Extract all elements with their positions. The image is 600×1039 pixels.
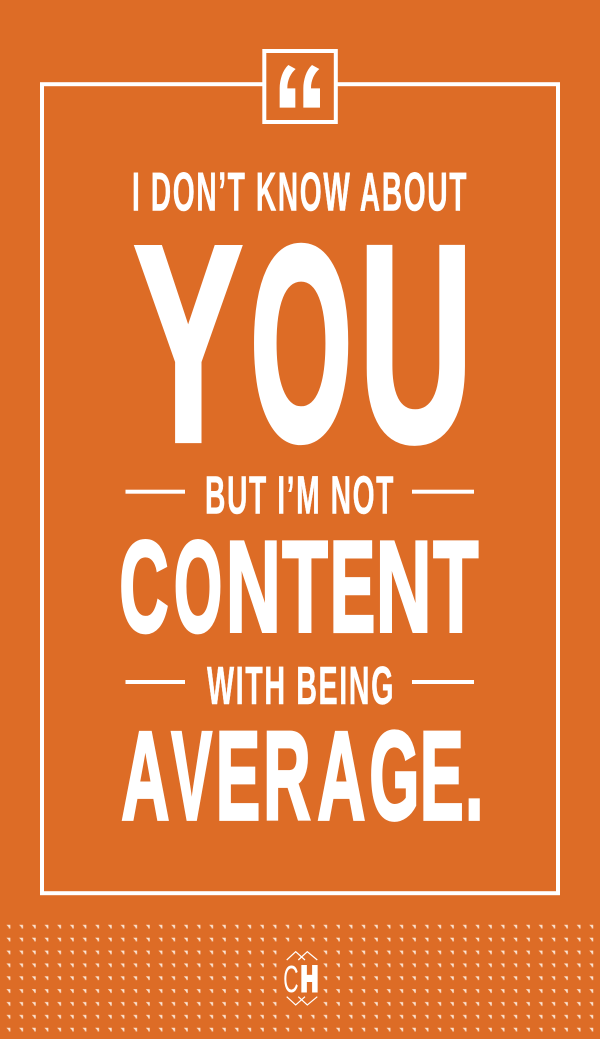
heading: YOU: U xyxy=(359,187,473,501)
heading: YOU: O xyxy=(250,189,352,497)
heading: AVERAGE.: R xyxy=(263,708,311,847)
divider row: with being: WITH BEING xyxy=(207,656,395,716)
heading: CONTENT: N xyxy=(226,515,281,659)
logo: CH: H xyxy=(301,959,318,999)
heading: AVERAGE.: E xyxy=(420,708,464,847)
logo: CH: C xyxy=(283,957,299,1000)
heading: AVERAGE.: V xyxy=(172,706,212,846)
heading: YOU xyxy=(134,187,473,501)
divider row: but I'm not: BUT I’M NOT xyxy=(205,465,395,525)
heading: AVERAGE.: . xyxy=(465,707,483,847)
frame xyxy=(42,84,558,893)
divider row: with being xyxy=(126,656,474,716)
divider row: but I'm not xyxy=(126,465,474,525)
heading: AVERAGE.: A xyxy=(122,707,169,847)
heading: CONTENT: E xyxy=(330,514,375,659)
heading: AVERAGE.: G xyxy=(370,707,419,847)
heading: CONTENT xyxy=(119,513,478,659)
heading: AVERAGE.: E xyxy=(216,707,260,847)
heading: CONTENT: N xyxy=(376,515,432,659)
heading: AVERAGE. xyxy=(122,706,483,847)
heading: YOU: Y xyxy=(134,187,243,501)
heading: CONTENT: T xyxy=(433,516,478,659)
heading: CONTENT: T xyxy=(282,515,328,659)
icon: quotation mark box xyxy=(264,51,336,122)
dot pattern band xyxy=(2,921,597,1037)
heading: AVERAGE.: A xyxy=(318,707,365,847)
heading: CONTENT: C xyxy=(119,513,168,659)
heading: CONTENT: O xyxy=(174,515,222,659)
logo: CH xyxy=(283,952,318,1005)
